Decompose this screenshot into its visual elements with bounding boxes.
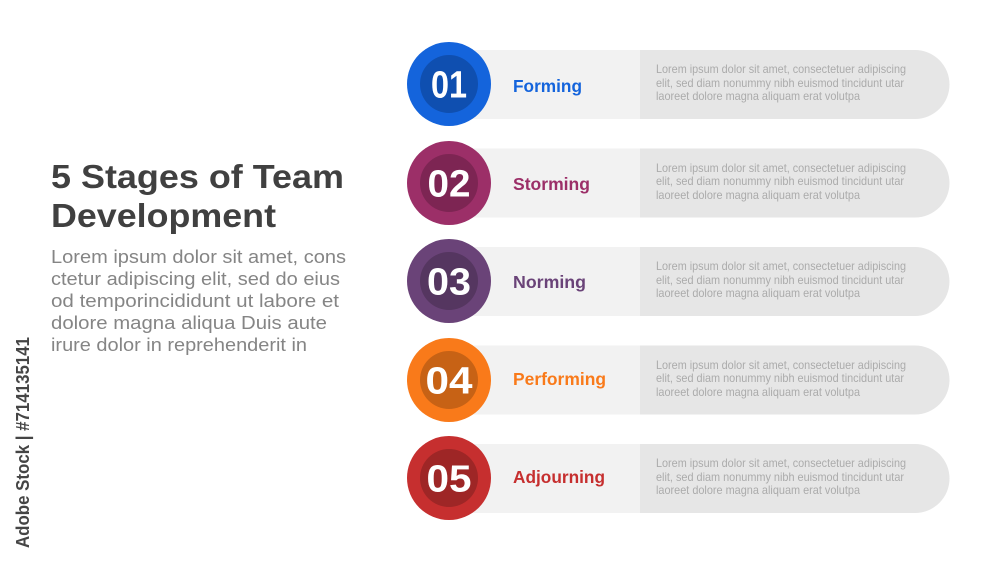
stock id side label: Adobe Stock | #714135141 <box>13 337 33 548</box>
row 5: Adjourning: Adjourning <box>513 467 605 487</box>
row 5: Adjourning: elit, sed diam nonummy nibh euismod tincidunt utar <box>656 470 904 484</box>
row 4: Performing <box>407 338 950 422</box>
intro text block: ctetur adipiscing elit, sed do eius <box>51 268 340 289</box>
intro text block <box>51 246 346 355</box>
row 5: Adjourning <box>407 436 950 520</box>
row 1: Forming: elit, sed diam nonummy nibh euismod tincidunt utar <box>656 76 904 90</box>
badge 04 <box>407 338 491 422</box>
title: Development <box>51 197 276 234</box>
badge 05 <box>407 436 491 520</box>
row 2: Storming: Lorem ipsum dolor sit amet, consectetuer adipiscing <box>656 161 906 175</box>
row 3: Norming: Norming <box>513 272 586 292</box>
badge 05: 05 <box>426 458 472 500</box>
badge 02 <box>407 141 491 225</box>
row 4: Performing: laoreet dolore magna aliquam erat volutpa <box>656 385 860 399</box>
row 5: Adjourning: laoreet dolore magna aliquam erat volutpa <box>656 483 860 497</box>
badge 02: 02 <box>428 164 470 206</box>
row 2: Storming: laoreet dolore magna aliquam erat volutpa <box>656 188 860 202</box>
intro text block: Lorem ipsum dolor sit amet, cons <box>51 246 346 267</box>
intro text block: dolore magna aliqua Duis aute <box>51 312 327 333</box>
badge 01: 01 <box>431 64 467 106</box>
row 2: Storming <box>407 141 950 225</box>
row 3: Norming <box>407 239 949 323</box>
row 4: Performing: Lorem ipsum dolor sit amet, consectetuer adipiscing <box>656 358 906 372</box>
row 3: Norming: elit, sed diam nonummy nibh euismod tincidunt utar <box>656 273 904 287</box>
row 3: Norming: laoreet dolore magna aliquam erat volutpa <box>656 286 860 300</box>
row 4: Performing: elit, sed diam nonummy nibh euismod tincidunt utar <box>656 371 904 385</box>
row 1: Forming <box>407 42 950 126</box>
row 4: Performing: Performing <box>513 369 606 389</box>
badge 03 <box>407 239 491 323</box>
row 1: Forming: laoreet dolore magna aliquam erat volutpa <box>656 89 860 103</box>
title: 5 Stages of Team <box>51 158 344 195</box>
badge 01 <box>407 42 491 126</box>
intro text block: od temporincididunt ut labore et <box>51 290 339 311</box>
badge 03: 03 <box>427 262 471 304</box>
row 1: Forming: Forming <box>513 76 582 96</box>
title <box>51 158 344 234</box>
row 3: Norming: Lorem ipsum dolor sit amet, consectetuer adipiscing <box>656 259 906 273</box>
row 2: Storming: Storming <box>513 174 590 194</box>
row 2: Storming: elit, sed diam nonummy nibh euismod tincidunt utar <box>656 174 904 188</box>
intro text block: irure dolor in reprehenderit in <box>51 334 307 355</box>
badge 04: 04 <box>426 360 472 402</box>
row 5: Adjourning: Lorem ipsum dolor sit amet, consectetuer adipiscing <box>656 456 906 470</box>
row 1: Forming: Lorem ipsum dolor sit amet, consectetuer adipiscing <box>656 62 906 76</box>
